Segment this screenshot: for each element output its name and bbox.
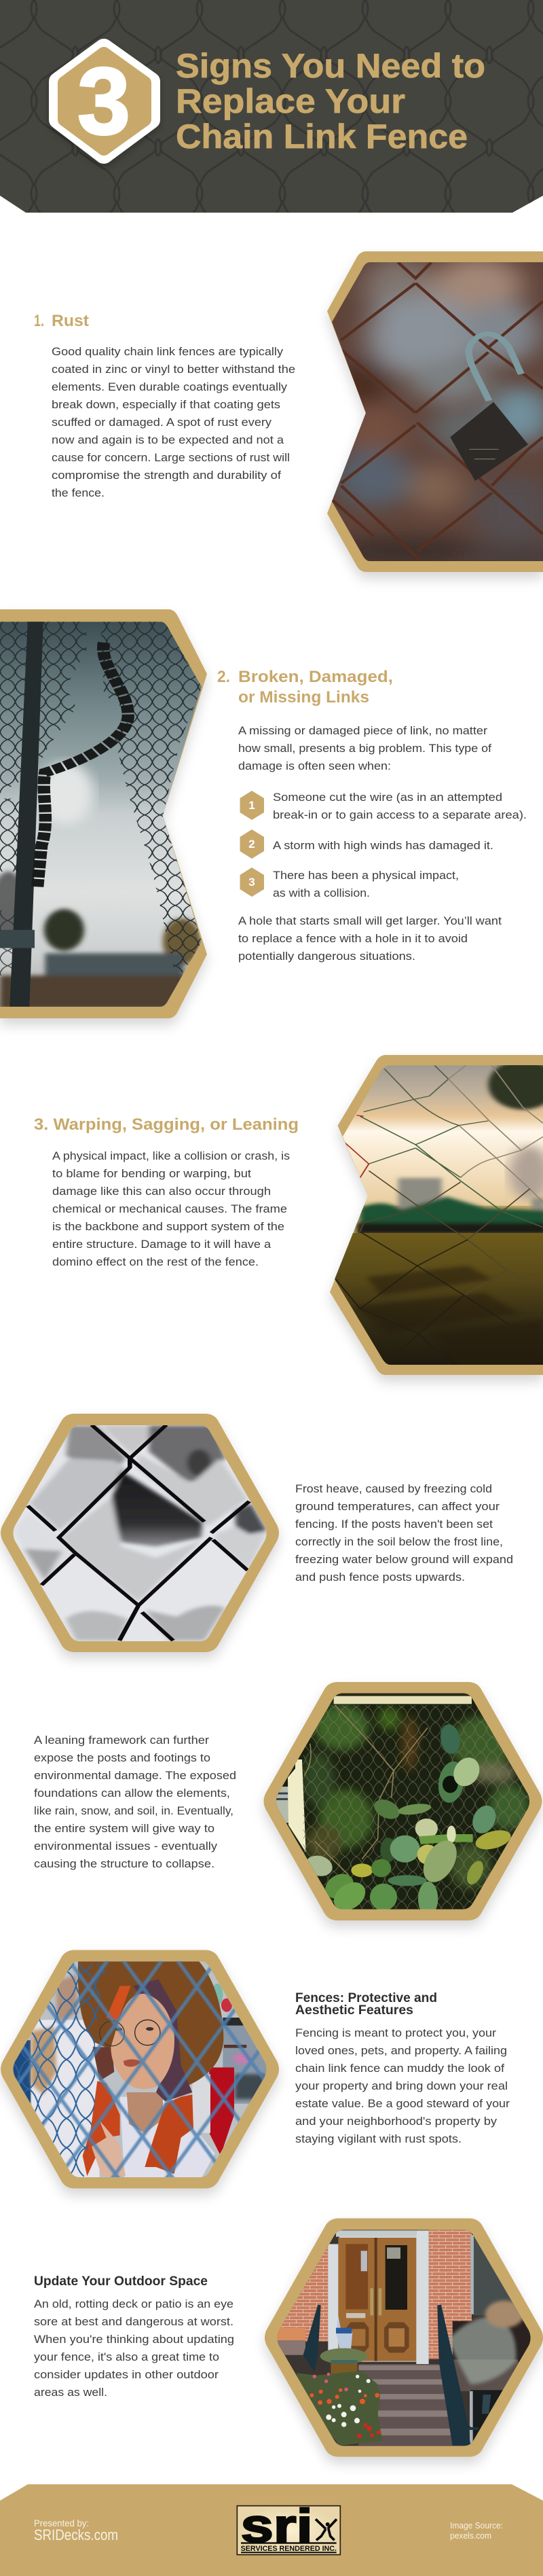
intro paragraph: how small, presents a big problem. This type of bbox=[238, 742, 491, 755]
text block: leaning framework: A leaning framework can further bbox=[34, 1734, 209, 1747]
presented by bbox=[34, 2518, 118, 2543]
text block: leaning framework: environmental issues - eventually bbox=[34, 1840, 218, 1853]
text block: frost heave: correctly in the soil below the frost line, bbox=[295, 1535, 503, 1548]
body text: rust: now and again is to be expected and not a bbox=[52, 433, 284, 446]
body text: update: An old, rotting deck or patio is an eye bbox=[34, 2297, 233, 2310]
text block: leaning framework: causing the structure to collapse. bbox=[34, 1857, 214, 1870]
branches bbox=[304, 1705, 428, 1875]
text block: leaning framework: like rain, snow, and soil, in. Eventually, bbox=[34, 1804, 233, 1817]
photo panel: rusty fence with padlock bbox=[322, 251, 543, 573]
text block: leaning framework: the entire system will give way to bbox=[34, 1822, 214, 1835]
hanging chain bbox=[37, 643, 128, 887]
footer bbox=[0, 2484, 543, 2576]
body text: rust: compromise the strength and durability of bbox=[52, 469, 281, 482]
railings bbox=[303, 2305, 479, 2446]
text block: update your outdoor space bbox=[34, 2274, 234, 2399]
image source: Image Source: bbox=[450, 2520, 503, 2530]
heading: broken links: 2. bbox=[217, 668, 230, 686]
fence wires bbox=[336, 1065, 543, 1365]
intro paragraph bbox=[238, 724, 491, 772]
umbrella bbox=[336, 2315, 352, 2353]
body text: rust: cause for concern. Large sections of rust will bbox=[52, 451, 290, 464]
logo: SRI Services Rendered Inc.: sri bbox=[241, 2499, 313, 2552]
shirt and neck bbox=[120, 2092, 215, 2179]
closing paragraph: to replace a fence with a hole in it to avoid bbox=[238, 932, 468, 945]
heading: broken links bbox=[217, 668, 393, 706]
flower bush bbox=[297, 2371, 382, 2446]
heading: rust: Rust bbox=[52, 312, 89, 330]
list item 3: as with a collision. bbox=[273, 887, 370, 899]
title bbox=[176, 47, 485, 156]
body text: update: When you're thinking about updating bbox=[34, 2333, 234, 2346]
photo panel: woman behind blue fence bbox=[0, 1950, 279, 2189]
title: Replace Your bbox=[176, 82, 405, 120]
list item 3: 3 bbox=[248, 876, 255, 889]
header background with chain link pattern bbox=[0, 0, 543, 213]
lower wall and plants bbox=[448, 2301, 531, 2444]
body text: update: your fence, it's also a great time to bbox=[34, 2350, 219, 2363]
text block: frost heave: freezing water below ground will expand bbox=[295, 1553, 513, 1566]
heading: rust: 1. bbox=[34, 312, 44, 330]
body text: fences: estate value. Be a good steward of your bbox=[295, 2097, 510, 2110]
body text: update: consider updates in other outdoor bbox=[34, 2368, 219, 2381]
body text: fences: and your neighborhood's property by bbox=[295, 2115, 498, 2128]
body text: warping: domino effect on the rest of the fence. bbox=[52, 1255, 259, 1268]
fence wires bbox=[28, 1425, 249, 1641]
text block: frost heave: and push fence posts upwards. bbox=[295, 1571, 465, 1584]
body text: warping bbox=[52, 1149, 290, 1268]
brick walls bbox=[276, 2230, 472, 2359]
closing paragraph: A hole that starts small will get larger. You’ll want bbox=[238, 914, 502, 927]
hair bbox=[83, 1979, 193, 2176]
text block: protective and aesthetic features bbox=[295, 1991, 510, 2145]
subheading: update: Update Your Outdoor Space bbox=[34, 2274, 208, 2289]
body text: update: areas as well. bbox=[34, 2386, 107, 2399]
wooden door bbox=[338, 2238, 416, 2361]
intro paragraph: damage is often seen when: bbox=[238, 759, 391, 772]
photo panel: front door and steps bbox=[265, 2219, 543, 2456]
photo panel: fence at sunset bbox=[330, 1055, 543, 1375]
body text: warping: A physical impact, like a collision or crash, is bbox=[52, 1149, 290, 1162]
body text: update bbox=[34, 2297, 234, 2399]
white top rail bbox=[334, 1696, 472, 1704]
body text: fences: Fencing is meant to protect you, your bbox=[295, 2026, 496, 2039]
padlock bbox=[450, 334, 528, 481]
text block: leaning framework: expose the posts and footings to bbox=[34, 1751, 210, 1764]
title: Signs You Need to bbox=[176, 47, 485, 85]
text block: leaning framework: foundations can allow the elements, bbox=[34, 1787, 230, 1800]
body text: fences: staying vigilant with rust spots. bbox=[295, 2132, 462, 2145]
cactus pads bbox=[303, 1723, 513, 1916]
body text: rust: the fence. bbox=[52, 486, 105, 499]
heading: rust bbox=[34, 312, 89, 330]
body text: rust: break down, especially if that coating gets bbox=[52, 398, 280, 411]
heading: warping: 3. Warping, Sagging, or Leaning bbox=[34, 1115, 299, 1134]
hat bbox=[78, 1961, 223, 2086]
photo panel: broken fence with chain bbox=[0, 609, 214, 1018]
body text: fences bbox=[295, 2026, 510, 2145]
body text: warping: entire structure. Damage to it will have a bbox=[52, 1238, 272, 1251]
list item 1: 1 bbox=[248, 799, 255, 812]
text block: frost heave bbox=[295, 1482, 513, 1584]
image source bbox=[450, 2520, 503, 2541]
face bbox=[100, 1994, 174, 2089]
body text: fences: chain link fence can muddy the look of bbox=[295, 2062, 504, 2075]
list item 1: break-in or to gain access to a separate area). bbox=[273, 808, 527, 821]
body text: warping: chemical or mechanical causes. The frame bbox=[52, 1202, 287, 1215]
subheading: fences: Fences: Protective and bbox=[295, 1991, 437, 2005]
body text: rust: Good quality chain link fences are typically bbox=[52, 345, 284, 358]
body text: warping: to blame for bending or warping, but bbox=[52, 1167, 251, 1180]
closing paragraph bbox=[238, 914, 502, 963]
body text: fences: your property and bring down your real bbox=[295, 2079, 508, 2092]
logo: SRI Services Rendered Inc. bbox=[237, 2499, 340, 2555]
body text: rust: elements. Even durable coatings eventually bbox=[52, 380, 288, 393]
subheading: fences bbox=[295, 1991, 437, 2018]
text block: leaning framework: environmental damage. The exposed bbox=[34, 1769, 236, 1782]
fence post bbox=[10, 622, 43, 1007]
header banner bbox=[0, 0, 543, 213]
hexagon badge with number 3: 3 bbox=[77, 48, 130, 154]
text block: frost heave: fencing. If the posts haven't been set bbox=[295, 1518, 493, 1531]
list item 3 bbox=[240, 867, 459, 899]
stone steps bbox=[358, 2364, 453, 2446]
text block: frost heave: Frost heave, caused by freezing cold bbox=[295, 1482, 492, 1495]
heading: broken links: or Missing Links bbox=[238, 688, 369, 706]
list item 2 bbox=[240, 829, 493, 859]
presented by: SRIDecks.com bbox=[34, 2526, 118, 2543]
shelves background bbox=[208, 1984, 268, 2155]
section 1: rust text bbox=[34, 312, 295, 499]
image source: pexels.com bbox=[450, 2530, 491, 2541]
section 2: broken links text bbox=[217, 668, 527, 963]
list item 2: 2 bbox=[248, 838, 255, 851]
hexagon badge with number 3 bbox=[58, 48, 151, 154]
left white post bbox=[276, 1759, 306, 1852]
right window bbox=[470, 2235, 526, 2315]
fence mesh bbox=[0, 622, 204, 980]
flower pot and plant bbox=[320, 2348, 368, 2376]
list item 2: A storm with high winds has damaged it. bbox=[273, 839, 493, 852]
list item 3: There has been a physical impact, bbox=[273, 869, 459, 882]
body text: rust bbox=[52, 345, 295, 499]
photo panel: cactus and fence bbox=[263, 1682, 543, 1920]
list item 1: Someone cut the wire (as in an attempted bbox=[273, 791, 502, 804]
photo panel: snowy fence bbox=[0, 1414, 279, 1652]
section 3: warping text bbox=[34, 1115, 299, 1268]
subheading: fences: Aesthetic Features bbox=[295, 2003, 413, 2018]
hand bbox=[92, 2121, 126, 2176]
text block: leaning framework bbox=[34, 1734, 236, 1870]
door frame bbox=[328, 2230, 429, 2364]
body text: fences: loved ones, pets, and property. A failing bbox=[295, 2044, 507, 2057]
title: Chain Link Fence bbox=[176, 118, 468, 156]
list item 1 bbox=[240, 791, 527, 821]
presented by: Presented by: bbox=[34, 2518, 89, 2528]
text block: frost heave: ground temperatures, can affect your bbox=[295, 1500, 500, 1513]
body text: rust: scuffed or damaged. A spot of rust every bbox=[52, 416, 272, 429]
body text: warping: damage like this can also occur through bbox=[52, 1185, 271, 1198]
body text: update: sore at best and dangerous at worst. bbox=[34, 2315, 233, 2328]
blue fence mesh bbox=[0, 1956, 272, 2183]
body text: warping: is the backbone and support system of the bbox=[52, 1220, 284, 1233]
footer background bbox=[0, 2484, 543, 2576]
closing paragraph: potentially dangerous situations. bbox=[238, 950, 415, 963]
intro paragraph: A missing or damaged piece of link, no matter bbox=[238, 724, 487, 737]
logo: SRI Services Rendered Inc.: SERVICES RENDERED INC. bbox=[241, 2545, 337, 2553]
heading: broken links: Broken, Damaged, bbox=[238, 668, 393, 686]
body text: rust: coated in zinc or vinyl to better withstand the bbox=[52, 363, 295, 376]
